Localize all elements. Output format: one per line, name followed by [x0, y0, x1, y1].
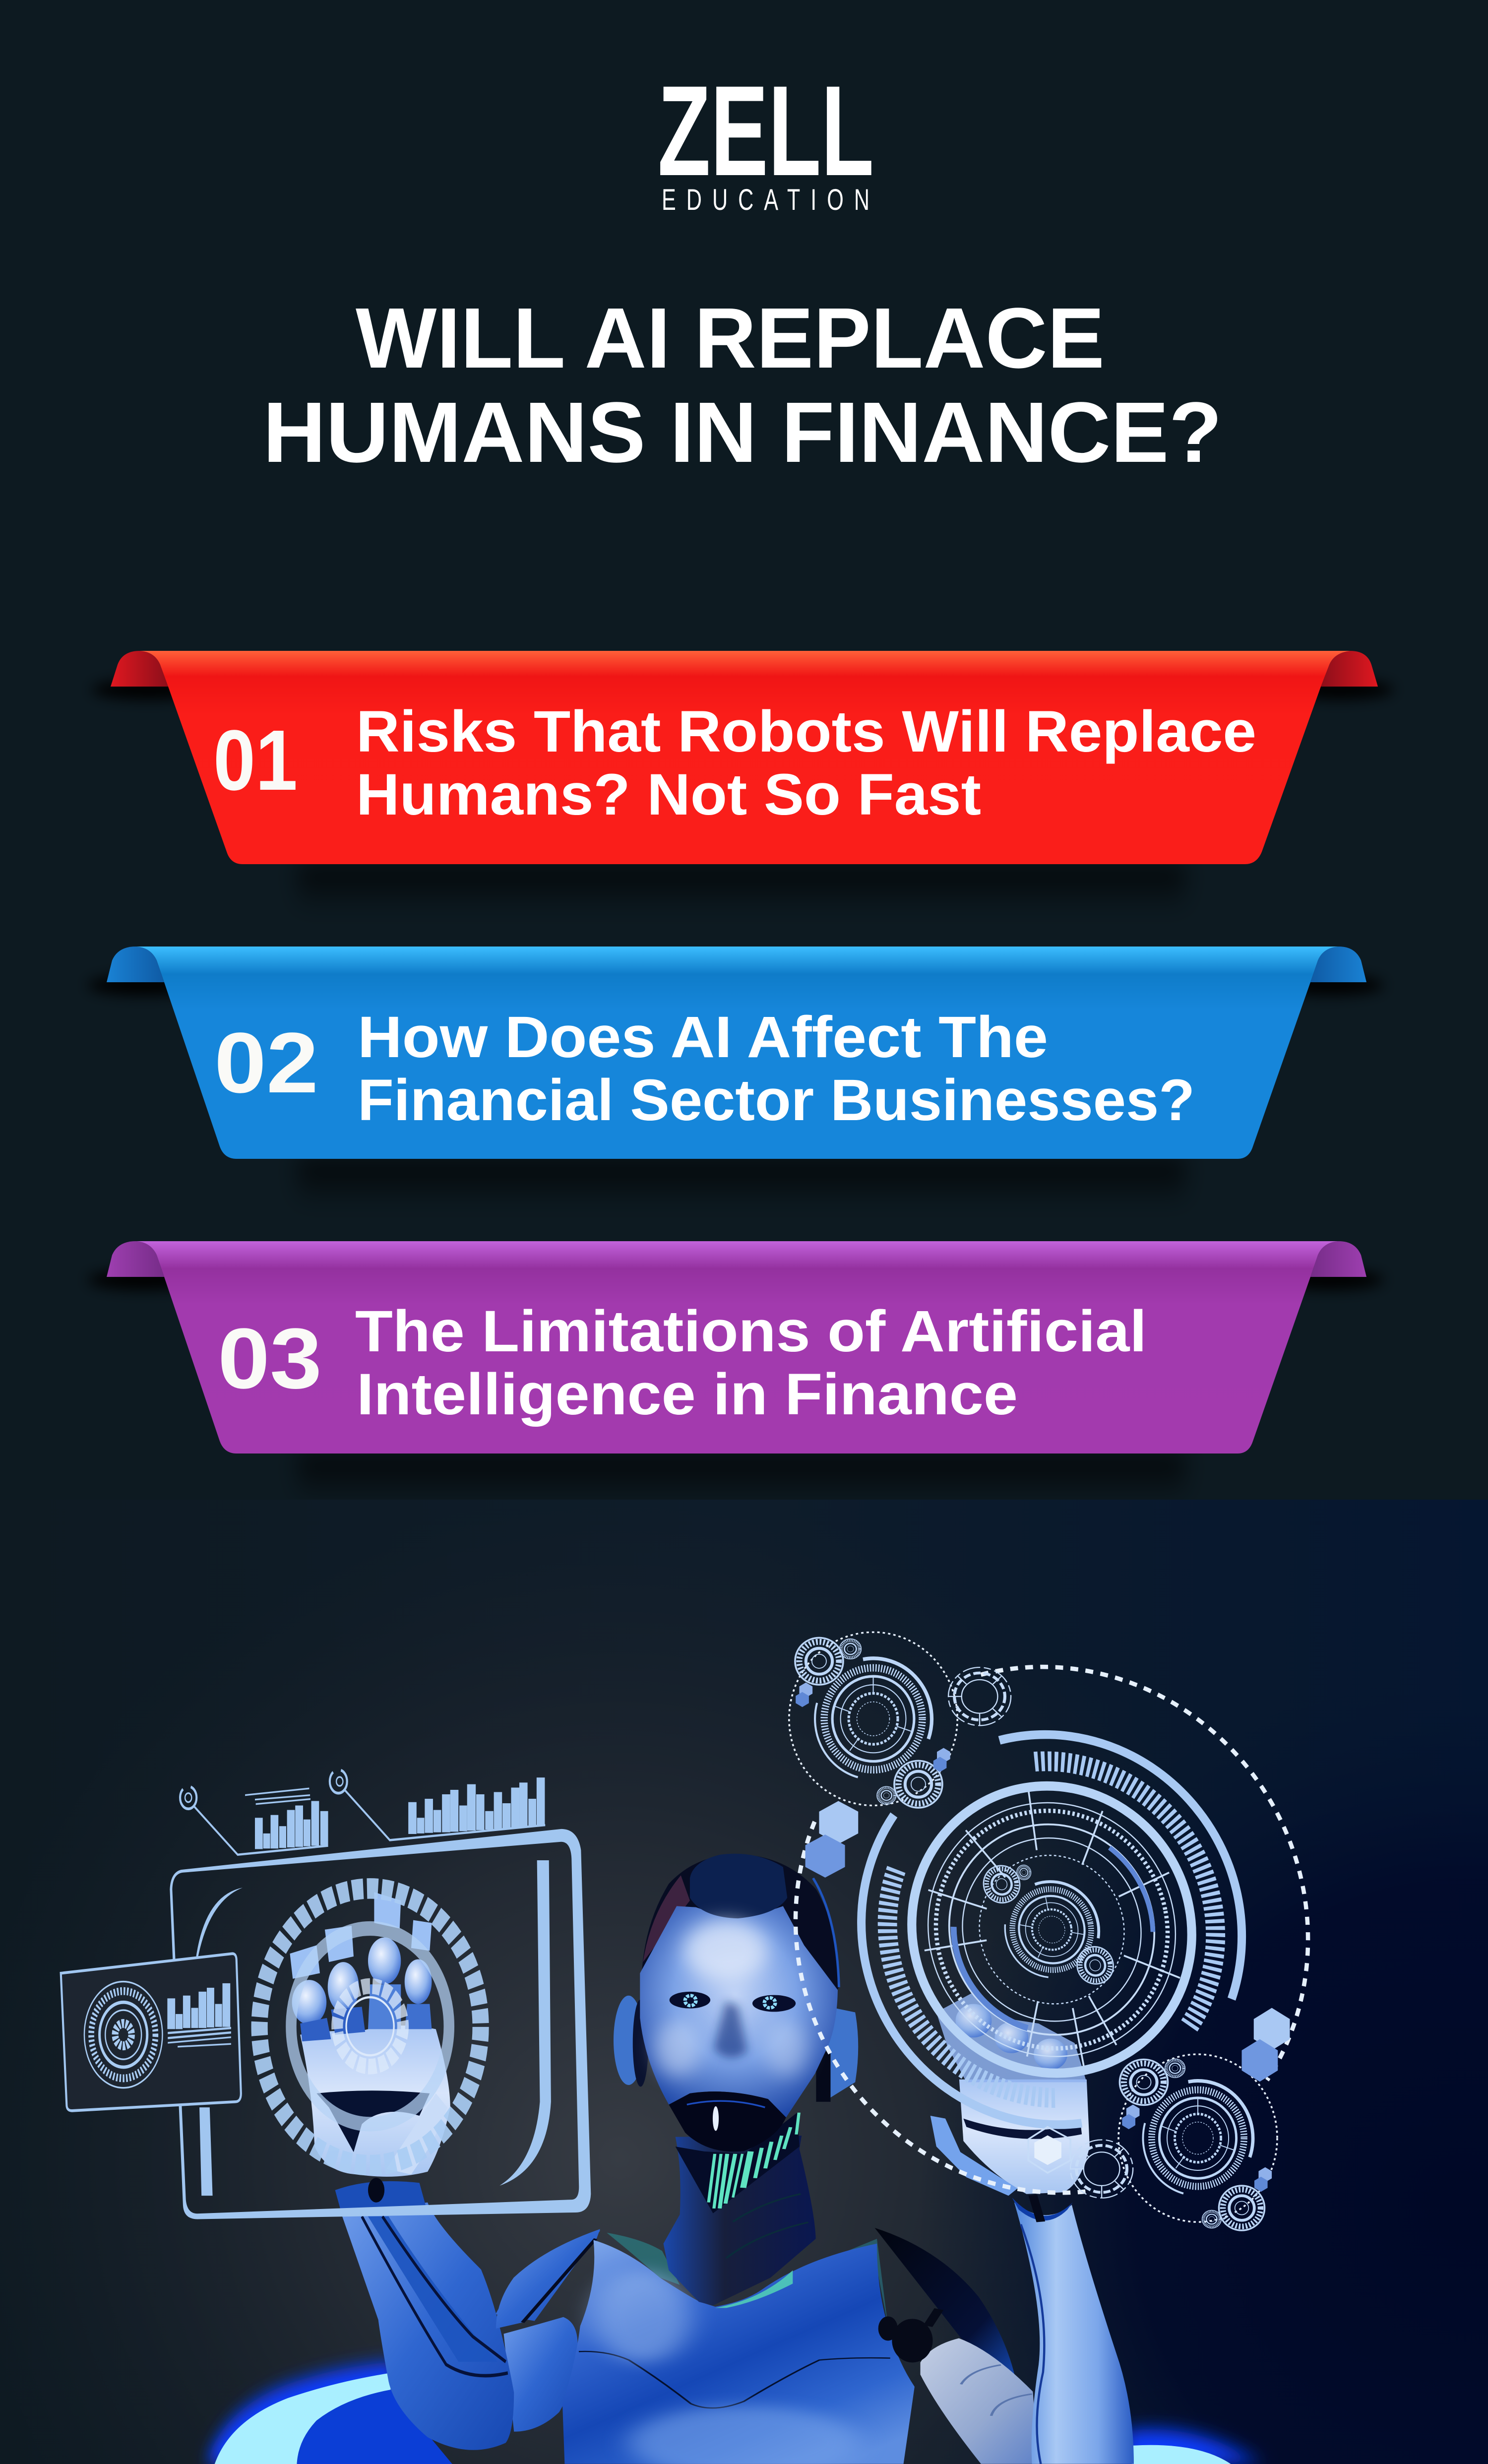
left shoulder fin [496, 2229, 600, 2329]
number 03: 03 [218, 1310, 322, 1406]
shoulder fin [496, 2230, 600, 2321]
wrist [335, 2181, 426, 2212]
robot illustration panel [0, 1500, 1488, 2464]
lower chest highlight [629, 2406, 859, 2464]
title [263, 290, 1222, 480]
top-left gear cluster [789, 1632, 1011, 1808]
glowing floor ring [205, 2362, 1261, 2464]
heading text: The Limitations of Artificial [355, 1299, 1147, 1364]
ribbon 02: financial sector [88, 947, 1384, 1208]
heading text: Risks That Robots Will Replace [356, 699, 1256, 764]
inner rings [898, 1771, 1202, 2088]
finger 1 [290, 1945, 331, 2041]
title: HUMANS IN FINANCE? [263, 384, 1222, 480]
headphones [614, 1996, 644, 2085]
small panel gauge [84, 1982, 162, 2088]
shoulder joint [892, 2319, 932, 2362]
bottom-right gear cluster [1070, 2054, 1277, 2230]
heading text: How Does AI Affect The [358, 1005, 1048, 1070]
satellite gears [981, 1863, 1023, 1905]
robot torso [496, 2113, 1134, 2464]
heading text: Intelligence in Finance [357, 1362, 1018, 1427]
eyes [670, 1992, 796, 2012]
finger 3 [368, 1892, 401, 2029]
hexagons [796, 1683, 1290, 2192]
teal neck stripes [709, 2113, 799, 2209]
ribbon 01: risks [92, 651, 1394, 914]
logo subtitle: EDUCATION [662, 184, 869, 217]
top chart left [180, 1786, 328, 1855]
heading text: Financial Sector Businesses? [358, 1068, 1195, 1133]
head plate [690, 1854, 787, 1918]
outer dashed ring [751, 1629, 1353, 2230]
robot left arm and hand [290, 1892, 600, 2450]
palm [300, 2025, 450, 2177]
right forearm [1014, 2203, 1134, 2464]
rim [887, 1766, 1216, 2094]
main panel frame [170, 1829, 591, 2219]
panel side bar left [199, 2107, 213, 2196]
ribbon 03: limitations [88, 1241, 1384, 1503]
center ring [337, 1986, 403, 2067]
inner ring [291, 1928, 449, 2124]
logo wordmark: ZELL [658, 59, 874, 202]
chest [562, 2240, 915, 2464]
nose and cheeks shade [714, 2001, 747, 2058]
heading text: Humans? Not So Fast [356, 762, 981, 827]
collar plates [607, 2233, 680, 2285]
number 01: 01 [213, 712, 298, 808]
hologram: right gauges [751, 1629, 1353, 2230]
panel side bar right [499, 1860, 551, 2186]
thumb [930, 2116, 1017, 2196]
forearm [341, 2203, 514, 2450]
heading text [356, 699, 1256, 827]
robot raised hand [930, 1993, 1090, 2196]
panel corner arc [196, 1888, 243, 1957]
right shoulder fin [875, 2228, 1015, 2377]
small panel [61, 1954, 241, 2111]
title: WILL AI REPLACE [356, 290, 1105, 386]
chest seam [579, 2351, 890, 2408]
tick arcs [859, 1738, 1243, 2120]
heading text [358, 1005, 1195, 1133]
finger 4 [405, 1920, 432, 2029]
thick outer arcs [828, 1706, 1275, 2153]
heading text [355, 1299, 1147, 1427]
neck [664, 2136, 816, 2305]
palm [959, 2080, 1090, 2194]
skull [642, 1854, 839, 2035]
segmented ring [259, 1889, 481, 2165]
finger 2 [325, 1926, 365, 2035]
logo: Zell Education [658, 59, 874, 217]
upper arm [504, 2317, 578, 2432]
small panel bars [167, 1983, 231, 2048]
number 02: 02 [214, 1014, 318, 1111]
teal collar stripes [715, 2271, 793, 2308]
center gear [997, 1875, 1107, 1983]
right upper arm [920, 2338, 1039, 2464]
fingers [936, 1993, 1087, 2082]
robot head [614, 1854, 858, 2151]
black chin [669, 2091, 786, 2151]
face [640, 1906, 838, 2117]
main dial [751, 1629, 1353, 2230]
thumb [386, 2093, 447, 2174]
top chart right [330, 1769, 545, 1840]
hologram: left dashboard [61, 1769, 591, 2219]
